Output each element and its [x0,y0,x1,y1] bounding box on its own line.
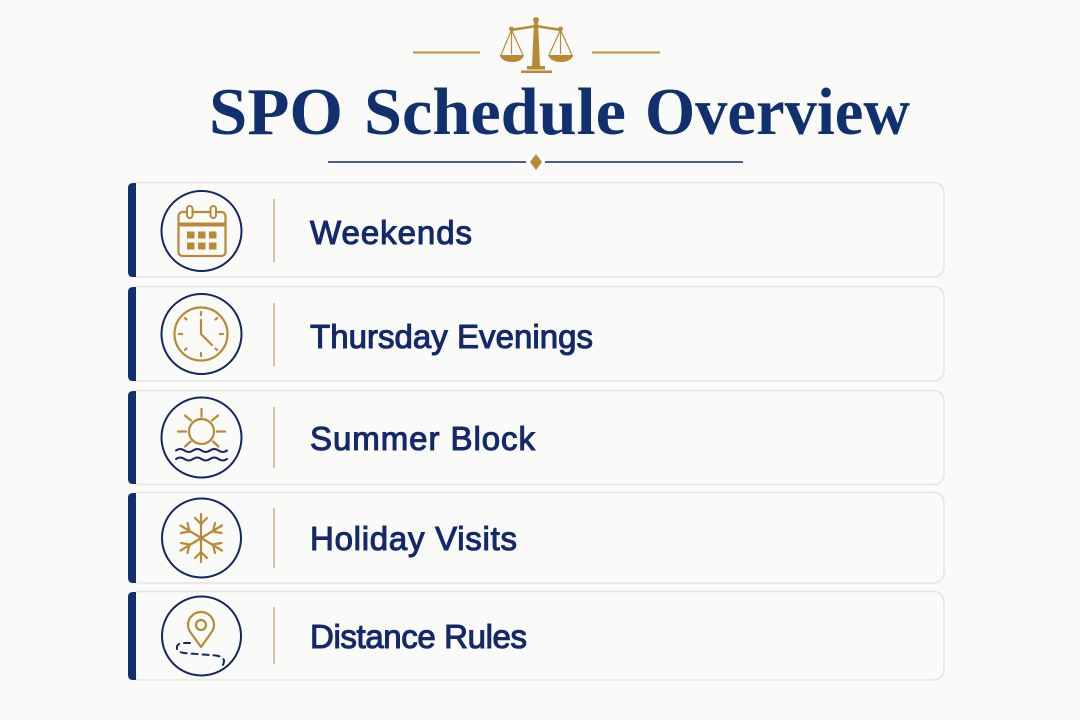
panel: Holiday Visits [128,492,944,583]
label: Weekends [310,214,472,251]
title divider with diamond [328,154,743,170]
label: Thursday Evenings [310,318,593,355]
panel: Summer Block [128,390,944,484]
icon: map pin with dashed route [162,596,241,676]
icon: calendar [162,191,242,271]
icon: sun over waves [162,398,242,478]
icon: snowflake [162,498,241,578]
label: Holiday Visits [310,520,517,557]
title: SPO [209,75,343,149]
title: Schedule [364,75,626,149]
title [209,75,911,149]
panel: Distance Rules [128,592,944,680]
icon: scales of justice with flanking lines [413,17,660,73]
title: Overview [645,75,911,149]
label: Summer Block [310,420,536,457]
panel: Weekends [128,182,944,277]
panel: Thursday Evenings [128,286,944,381]
icon: clock [162,294,242,374]
label: Distance Rules [310,618,527,655]
